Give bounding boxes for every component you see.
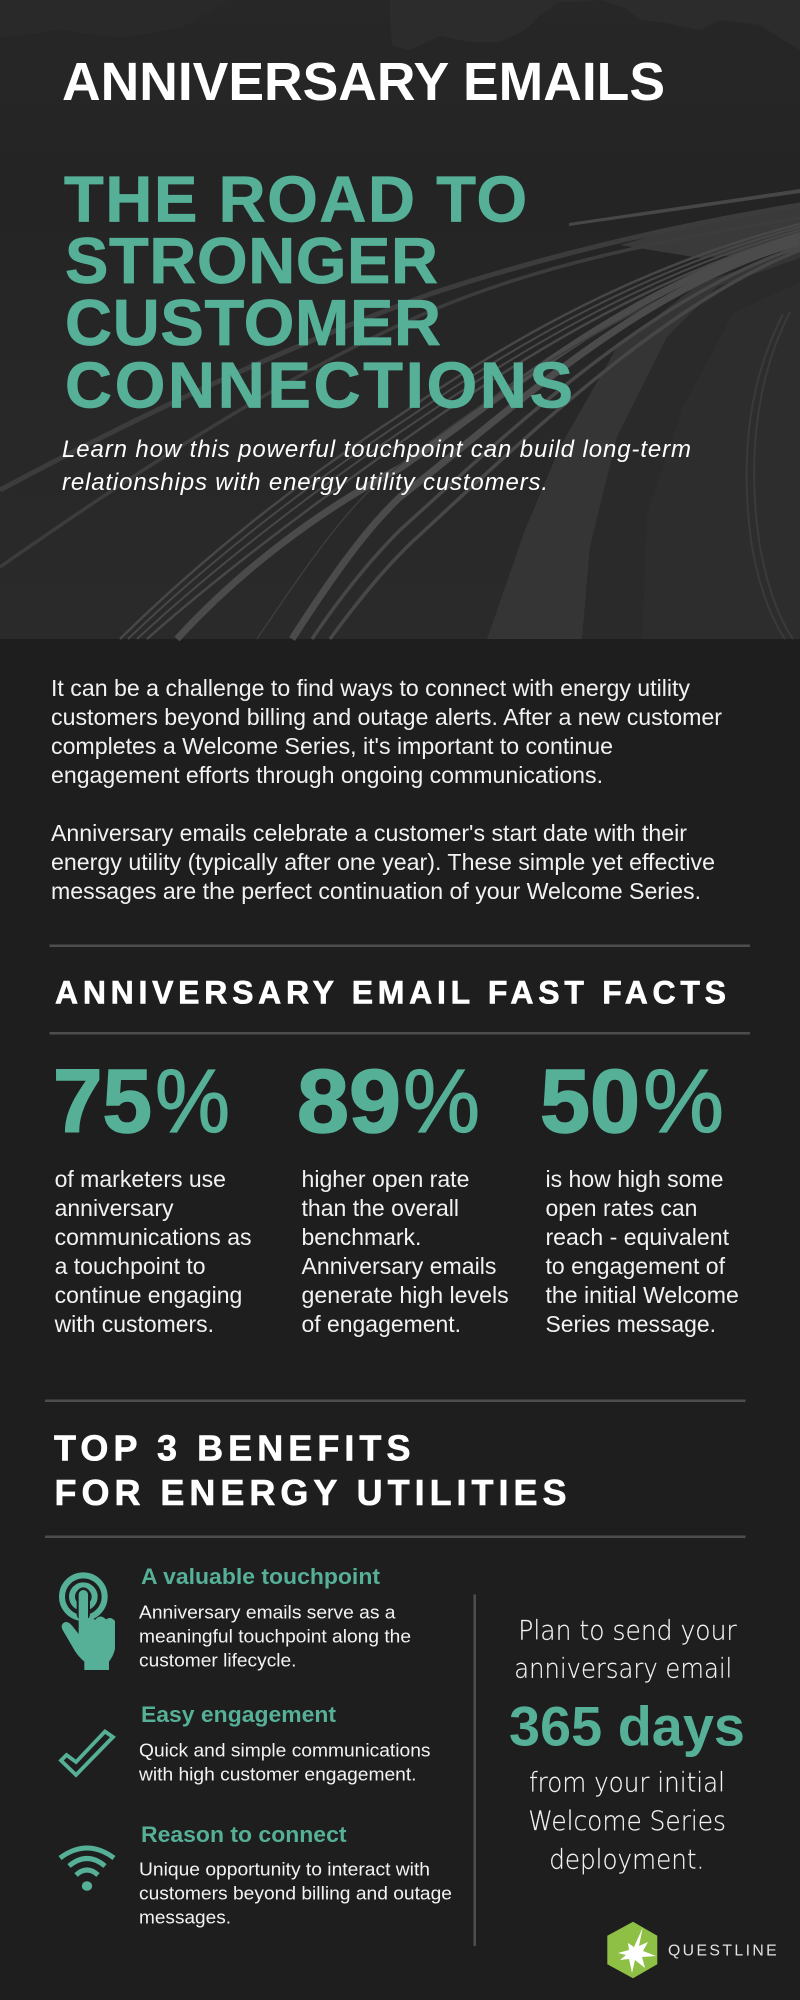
fact text: 89%: higher open rate	[302, 1166, 469, 1192]
callout: 365 days: from your initial	[529, 1768, 725, 1799]
heading: top 3 benefits	[54, 1428, 566, 1513]
benefit: easy engagement: Easy engagement	[141, 1702, 337, 1727]
callout: 365 days	[509, 1615, 745, 1875]
fact text: 50%: the initial Welcome	[546, 1282, 739, 1308]
stat: 89%: %	[403, 1052, 480, 1152]
intro text: completes a Welcome Series, it's important to continue	[51, 733, 613, 759]
fact text: 75%: communications as	[55, 1224, 251, 1250]
benefit: a valuable touchpoint	[139, 1564, 411, 1671]
fact text: 50%: to engagement of	[546, 1253, 726, 1279]
intro text: customers beyond billing and outage alerts. After a new customer	[51, 704, 722, 730]
benefit: a valuable touchpoint: meaningful touchpoint along the	[139, 1626, 411, 1646]
fact text: 50%: is how high some	[546, 1166, 724, 1192]
fact text: 50%: open rates can	[546, 1195, 697, 1221]
headline	[64, 162, 573, 422]
subtitle: Learn how this powerful touchpoint can build long-term	[62, 436, 691, 463]
stat: 89%	[297, 1052, 480, 1152]
fact text: 50%	[546, 1166, 739, 1337]
intro text: It can be a challenge to find ways to connect with energy utility	[51, 675, 691, 701]
fact text: 75%: a touchpoint to	[55, 1253, 206, 1279]
heading: top 3 benefits: FOR ENERGY UTILITIES	[54, 1472, 566, 1513]
fact text: 50%: reach - equivalent	[546, 1224, 730, 1250]
panel: hero photo background	[0, 0, 800, 639]
headline: THE ROAD TO	[64, 162, 527, 236]
headline: CONNECTIONS	[65, 348, 573, 422]
callout: 365 days: Plan to send your	[518, 1615, 737, 1646]
benefit: easy engagement	[138, 1702, 430, 1785]
fact text: 50%: Series message.	[546, 1311, 716, 1337]
heading: top 3 benefits: TOP 3 BENEFITS	[54, 1428, 410, 1468]
stat: 75%	[53, 1052, 230, 1152]
benefit: a valuable touchpoint: customer lifecycle.	[139, 1650, 296, 1671]
heading: fast facts: ANNIVERSARY EMAIL FAST FACTS	[55, 974, 726, 1010]
callout: 365 days: anniversary email	[514, 1653, 732, 1684]
intro text: energy utility (typically after one year). These simple yet effective	[51, 849, 715, 875]
intro text: engagement efforts through ongoing communications.	[51, 762, 603, 788]
benefit: reason to connect: Reason to connect	[141, 1822, 347, 1847]
icon: touch target hand	[62, 1575, 115, 1670]
benefit: reason to connect: messages.	[139, 1907, 231, 1928]
callout: 365 days: deployment.	[549, 1844, 704, 1875]
subtitle: relationships with energy utility customers.	[62, 469, 548, 496]
benefit: reason to connect: Unique opportunity to interact with	[139, 1858, 430, 1880]
fact text: 89%	[302, 1166, 509, 1337]
benefit: easy engagement: with high customer engagement.	[138, 1764, 416, 1785]
fact text: 75%: continue engaging	[55, 1282, 242, 1308]
intro text: Anniversary emails celebrate a customer's start date with their	[51, 820, 687, 846]
callout: 365 days: 365 days	[509, 1694, 745, 1757]
fact text: 89%: than the overall	[302, 1195, 459, 1221]
intro text: messages are the perfect continuation of your Welcome Series.	[51, 878, 701, 904]
callout: 365 days: Welcome Series	[528, 1806, 726, 1837]
icon: check mark	[61, 1732, 113, 1775]
icon: wifi signal	[60, 1848, 114, 1891]
fact text: 75%	[54, 1166, 251, 1337]
stat: 89%: 89	[297, 1052, 401, 1152]
benefit: a valuable touchpoint: Anniversary emails serve as a	[139, 1602, 396, 1622]
fact text: 75%: anniversary	[55, 1195, 174, 1221]
logo: Questline	[607, 1922, 777, 1978]
stat: 50%: 50	[540, 1052, 640, 1152]
headline: STRONGER	[65, 224, 438, 297]
benefit: a valuable touchpoint: A valuable touchpoint	[141, 1564, 381, 1589]
stat: 50%	[540, 1052, 724, 1152]
logo: Questline: QUESTLINE	[668, 1942, 777, 1959]
stat: 50%: %	[643, 1052, 724, 1152]
fact text: 75%: with customers.	[54, 1311, 214, 1337]
benefit: reason to connect: customers beyond billing and outage	[139, 1883, 452, 1904]
fact text: 75%: of marketers use	[55, 1166, 226, 1192]
headline: CUSTOMER	[65, 286, 441, 359]
fact text: 89%: generate high levels	[302, 1282, 509, 1308]
stat: 75%: 75	[53, 1052, 152, 1152]
intro text	[51, 675, 722, 904]
fact text: 89%: of engagement.	[302, 1311, 461, 1337]
benefit: reason to connect	[139, 1822, 452, 1928]
benefit: easy engagement: Quick and simple communications	[139, 1739, 430, 1760]
stat: 75%: %	[155, 1052, 230, 1152]
subtitle	[62, 436, 691, 496]
fact text: 89%: Anniversary emails	[302, 1253, 496, 1279]
fact text: 89%: benchmark.	[302, 1224, 421, 1250]
title: ANNIVERSARY EMAILS	[62, 52, 665, 112]
